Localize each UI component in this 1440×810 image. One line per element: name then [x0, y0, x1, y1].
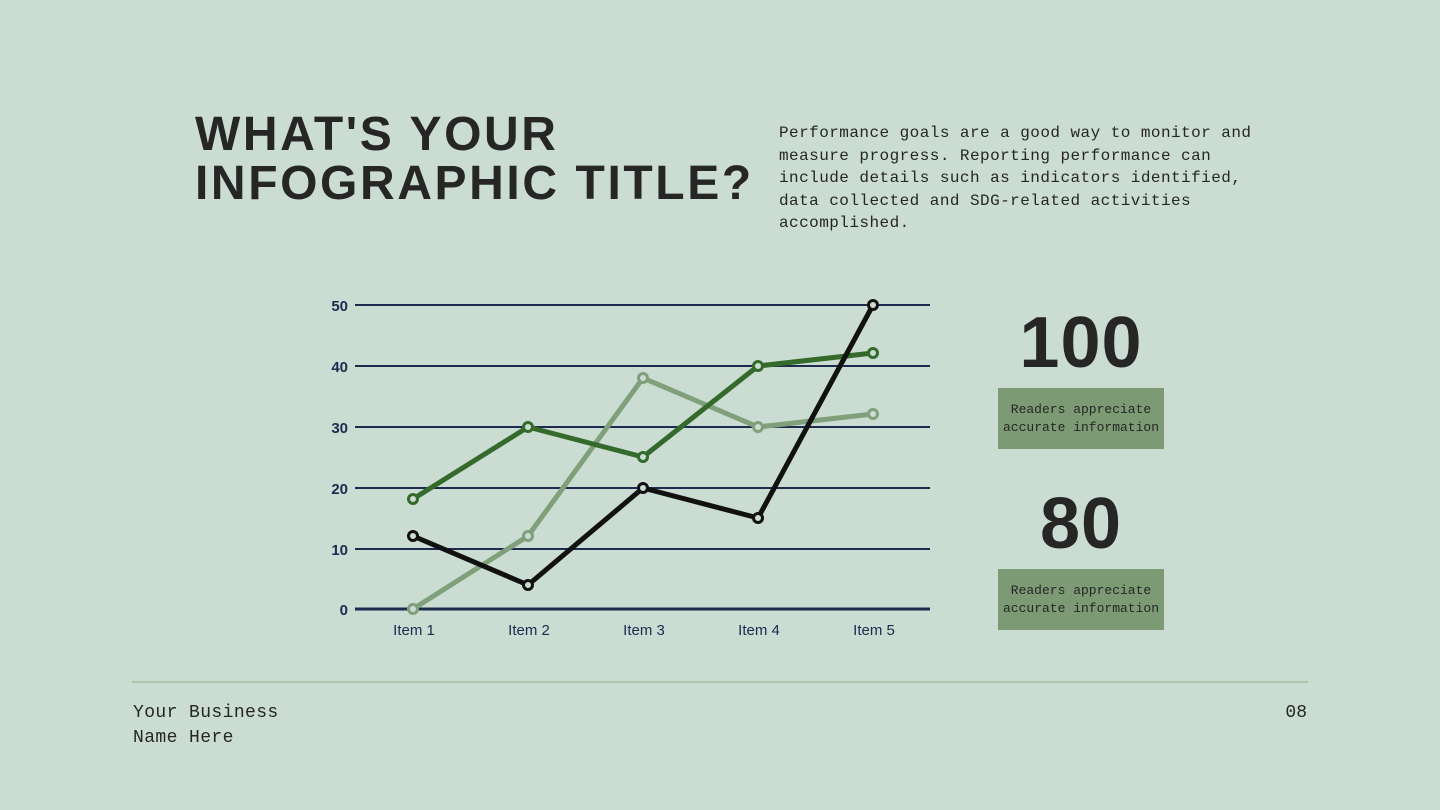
line chart: 20	[331, 481, 348, 498]
stat box 2	[998, 569, 1164, 630]
line chart: 0	[340, 602, 348, 619]
line chart: Item 1	[393, 622, 435, 639]
line chart: Item 4	[738, 622, 780, 639]
stat box 2: Readers appreciate	[1011, 582, 1151, 598]
line chart: Item 3	[623, 622, 665, 639]
stat 80: 80	[1040, 484, 1122, 564]
title: WHAT'S YOUR	[195, 108, 559, 161]
description text: Performance goals are a good way to monitor and measure progress. Reporting performance can include details such as indicators identified, data collected and SDG-related activities accomplished.	[779, 124, 1251, 232]
line chart: 10	[331, 542, 348, 559]
page number: 08	[1285, 703, 1307, 723]
stat box 2: accurate information	[1003, 600, 1159, 616]
line chart: 40	[331, 359, 348, 376]
title	[195, 108, 754, 210]
line chart: Item 2	[508, 622, 550, 639]
line chart: 50	[331, 298, 348, 315]
line chart: Item 5	[853, 622, 895, 639]
line chart: 30	[331, 420, 348, 437]
footer business name	[133, 703, 279, 748]
stat box 1	[998, 388, 1164, 449]
stat box 1: accurate information	[1003, 420, 1159, 434]
title: INFOGRAPHIC TITLE?	[195, 157, 754, 210]
stat box 1: Readers appreciate	[1011, 402, 1151, 416]
footer business name: Your Business	[133, 703, 279, 723]
stat 100: 100	[1019, 303, 1143, 383]
footer business name: Name Here	[133, 728, 234, 748]
